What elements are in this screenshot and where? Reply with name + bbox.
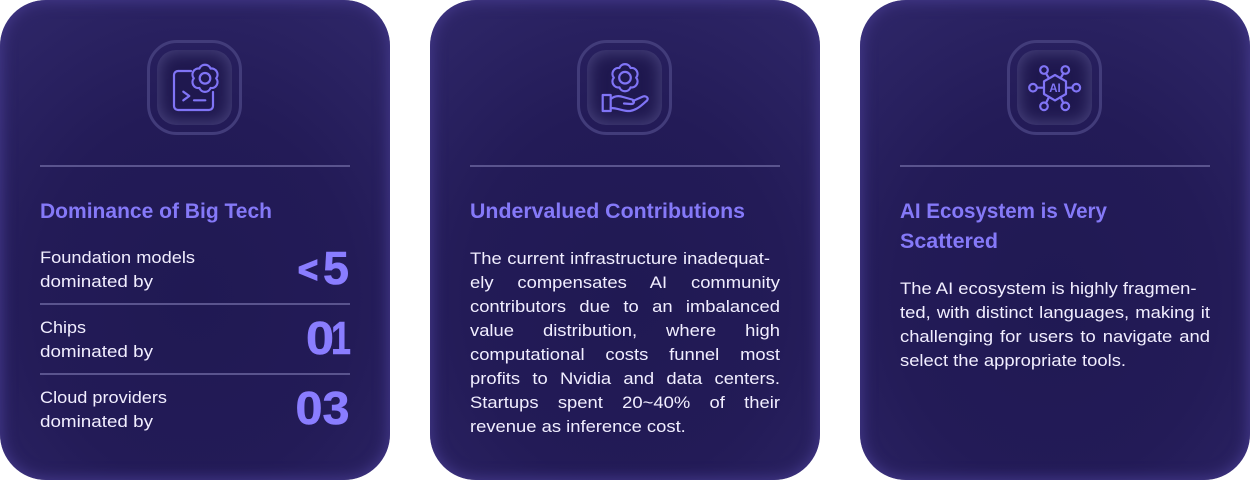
- stat: cloud providers: [40, 382, 350, 434]
- text block: ecosystem description: challenging for users to navigate and: [900, 328, 1210, 346]
- text block: ecosystem description: ted, with distinct languages, making it: [900, 304, 1210, 322]
- text block: ecosystem description: The AI ecosystem is highly fragmen-: [900, 280, 1197, 298]
- stat: cloud providers: 03: [296, 382, 350, 434]
- text block: ecosystem description: select the appropriate tools.: [900, 352, 1126, 370]
- stat: chips: [40, 312, 351, 364]
- text block: contributions description: revenue as inference cost.: [470, 418, 686, 436]
- stat: cloud providers: dominated by: [40, 413, 154, 431]
- stat: cloud providers: Cloud providers: [40, 389, 167, 407]
- heading: Dominance of Big Tech: [40, 199, 272, 223]
- text block: contributions description: ely compensates AI community: [470, 274, 780, 292]
- text block: contributions description: [470, 250, 780, 436]
- heading: AI Ecosystem is Very: [900, 199, 1107, 223]
- icon: AI hexagon network: AI: [1049, 83, 1061, 95]
- heading: Undervalued Contributions: [470, 199, 745, 223]
- stat: foundation models: [40, 242, 349, 294]
- stat: chips: 0: [306, 312, 334, 364]
- text block: contributions description: value distribution, where high: [470, 322, 780, 340]
- text block: contributions description: profits to Nvidia and data centers.: [470, 370, 780, 388]
- heading: [900, 199, 1107, 253]
- stat: chips: dominated by: [40, 343, 154, 361]
- text block: contributions description: The current infrastructure inadequat-: [470, 250, 770, 268]
- stat: foundation models: Foundation models: [40, 249, 195, 267]
- icon: hand holding gear: [577, 40, 672, 135]
- text block: contributions description: contributors due to an imbalanced: [470, 298, 780, 316]
- icon: AI hexagon network: [1007, 40, 1102, 135]
- panel: Dominance of Big Tech: [0, 0, 390, 480]
- heading: Scattered: [900, 229, 998, 253]
- panel content: heading and statistics: [40, 199, 351, 434]
- panel: AI Ecosystem is Very Scattered: [860, 0, 1250, 480]
- stat: foundation models: dominated by: [40, 273, 154, 291]
- text block: ecosystem description: [900, 280, 1210, 370]
- icon: terminal window with gear: [147, 40, 242, 135]
- text block: contributions description: Startups spent 20~40% of their: [470, 394, 780, 412]
- stat: foundation models: 5: [323, 242, 349, 294]
- panel: Undervalued Contributions: [430, 0, 820, 480]
- stat: chips: Chips: [40, 319, 86, 337]
- text block: contributions description: computational costs funnel most: [470, 346, 780, 364]
- stat: chips: 1: [331, 312, 351, 364]
- stat: foundation models: <: [298, 249, 318, 290]
